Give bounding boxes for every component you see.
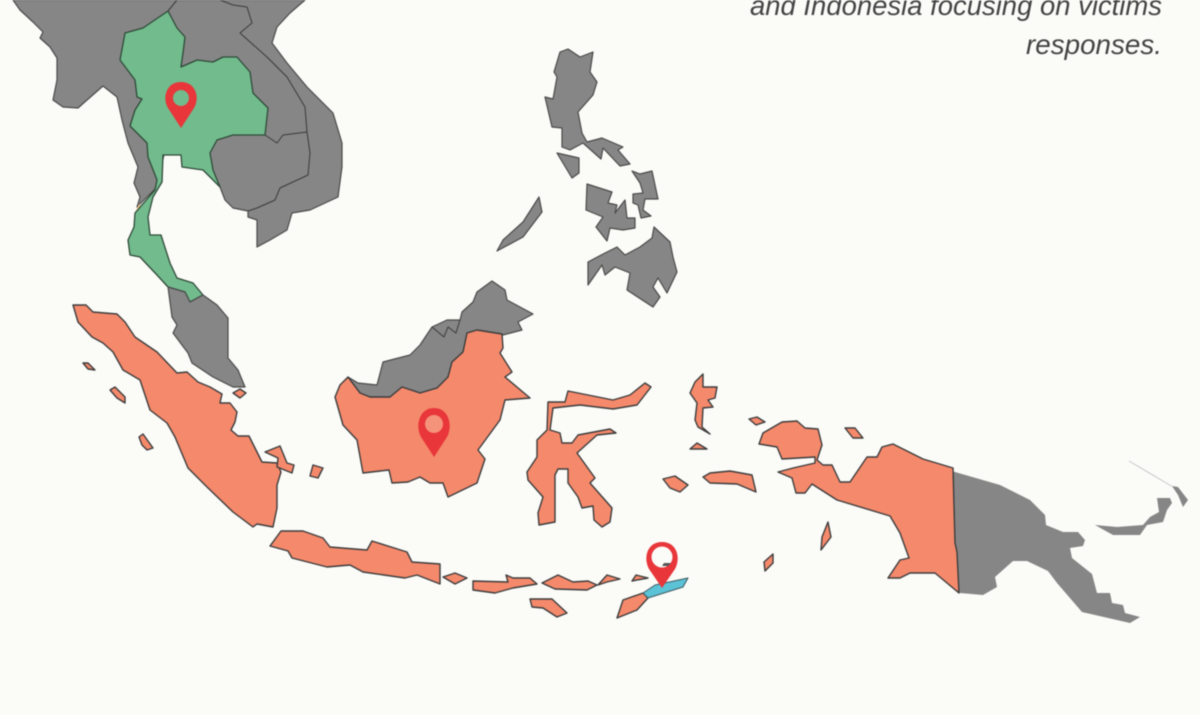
Kalimantan xyxy=(335,330,530,497)
text block: study description: responses. xyxy=(1026,29,1162,60)
Maluku islands xyxy=(663,374,863,571)
Java and Lesser Sunda islands xyxy=(270,531,648,618)
Malaysian Borneo and Brunei xyxy=(348,281,533,397)
text block: study description xyxy=(750,0,1162,60)
Philippines xyxy=(497,49,677,307)
location pin: Thailand xyxy=(165,82,197,128)
Timor-Leste xyxy=(643,578,688,598)
Peninsular Malaysia xyxy=(168,287,245,387)
Sulawesi xyxy=(527,383,651,527)
Sumatra and nearby islands xyxy=(73,305,323,527)
Thailand xyxy=(120,11,268,302)
mainland Southeast Asia: Myanmar, Laos, Vietnam, Cambodia xyxy=(13,0,342,247)
location pin: Kalimantan xyxy=(418,408,450,457)
Papua New Guinea xyxy=(948,461,1188,623)
Indonesian Papua xyxy=(759,421,959,593)
location pin: Timor-Leste xyxy=(646,542,678,588)
